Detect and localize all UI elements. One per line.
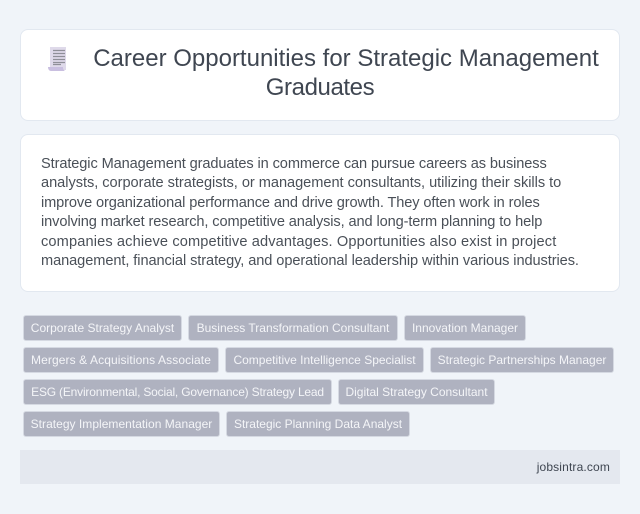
tag — [23, 315, 182, 341]
tag: ESG (Environmental, Social, Governance) Strategy Lead — [31, 385, 324, 399]
tag: Business Transformation Consultant — [197, 321, 389, 335]
description panel — [20, 134, 620, 292]
description text: Strategic Management graduates in commerce can pursue careers as business — [41, 156, 547, 172]
description text — [41, 156, 579, 269]
tag — [23, 411, 220, 437]
description text: improve organizational performance and drive growth. They often work in roles — [41, 195, 540, 211]
tag — [338, 379, 495, 405]
header panel — [20, 29, 620, 121]
tag: Corporate Strategy Analyst — [31, 321, 174, 335]
tag — [430, 347, 614, 373]
tag: Strategic Partnerships Manager — [438, 353, 606, 367]
tag: Innovation Manager — [412, 321, 518, 335]
tag — [225, 347, 424, 373]
footer source text: jobsintra.com — [537, 460, 610, 474]
tag: Strategic Planning Data Analyst — [234, 417, 402, 431]
description text: companies achieve competitive advantages. Opportunities also exist in project — [41, 234, 556, 250]
tag — [226, 411, 410, 437]
title: Graduates — [266, 74, 374, 101]
tag: Digital Strategy Consultant — [345, 385, 488, 399]
description text: involving market research, competitive analysis, and long-term planning to help — [41, 214, 542, 230]
tag — [23, 347, 219, 373]
tag — [404, 315, 526, 341]
tag: Competitive Intelligence Specialist — [233, 353, 416, 367]
career tags — [23, 315, 614, 437]
tag: Mergers & Acquisitions Associate — [31, 353, 211, 367]
footer bar — [20, 450, 620, 484]
tag: Strategy Implementation Manager — [31, 417, 212, 431]
tag — [188, 315, 398, 341]
description text: management, financial strategy, and operational leadership within various industries. — [41, 253, 579, 269]
icon: document scroll — [48, 47, 66, 71]
tag — [23, 379, 332, 405]
title: Career Opportunities for Strategic Management — [93, 45, 599, 72]
description text: analysts, corporate strategists, or management consultants, utilizing their skills to — [41, 175, 561, 191]
title — [93, 45, 599, 101]
